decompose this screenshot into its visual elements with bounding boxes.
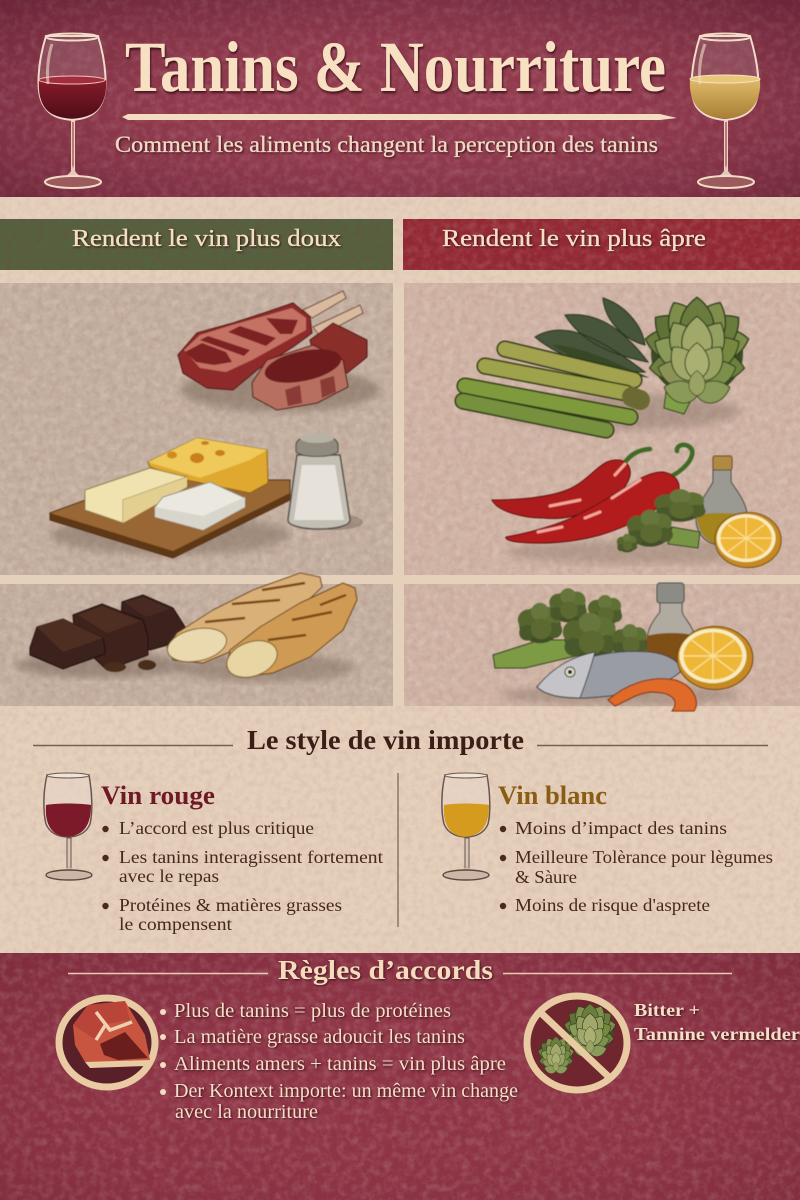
icon: cheese board [50, 433, 363, 558]
heading: vin blanc: Vin blanc [498, 781, 607, 810]
list: white wine bullets: Moins d’impact des tanins [515, 818, 727, 838]
icon: broccoli, fish, lemon and shrimp [493, 583, 753, 711]
panel: red banner [403, 219, 800, 270]
list: white wine bullets [500, 818, 773, 915]
icon: chilies, oil and lemon [492, 445, 781, 568]
icon: dark chocolate [15, 595, 185, 678]
panel: softening foods [0, 283, 393, 706]
callout: bitter tannins [634, 1000, 800, 1044]
heading: wine style: Le style de vin importe [247, 725, 524, 755]
list: white wine bullets: Moins de risque d'asprete [515, 895, 710, 915]
icon: grilled meat [178, 291, 380, 412]
icon: oil bottle [696, 456, 747, 545]
callout: bitter tannins: Bitter + [634, 1000, 700, 1020]
parchment texture [0, 197, 800, 954]
list: red wine bullets: Les tanins interagissent fortement [119, 847, 383, 867]
icon: no bitter artichoke [527, 996, 627, 1090]
icon: meat medallion [59, 998, 155, 1087]
icon: small oil bottle [647, 583, 695, 662]
divider [397, 773, 399, 927]
list: pairing rules [160, 1000, 518, 1123]
list: red wine bullets: L’accord est plus critique [119, 818, 314, 838]
list: white wine bullets: & Sàure [515, 867, 577, 887]
panel: red banner: Rendent le vin plus âpre [442, 226, 706, 252]
list: red wine bullets: le compensent [119, 914, 232, 934]
list: pairing rules: avec la nourriture [175, 1101, 318, 1123]
icon: red wine glass small [44, 773, 92, 880]
list: white wine bullets: Meilleure Tolèrance pour lègumes [515, 847, 773, 867]
subtitle: Comment les aliments changent la perception des tanins [115, 132, 658, 157]
panel: green banner: Rendent le vin plus doux [72, 226, 341, 252]
icon: salt shaker [288, 433, 363, 530]
title: Tanins & Nourriture [125, 27, 666, 107]
list: red wine bullets: Protéines & matières grasses [119, 895, 342, 915]
list: pairing rules: La matière grasse adoucit les tanins [174, 1026, 465, 1048]
list: pairing rules: Aliments amers + tanins = vin plus âpre [174, 1053, 506, 1075]
heading: pairing rules: Règles d’accords [278, 955, 493, 985]
list: pairing rules: Plus de tanins = plus de protéines [174, 1000, 451, 1022]
panel: header [0, 0, 800, 197]
panel: red wine [44, 773, 383, 934]
callout: bitter tannins: Tannine vermelder [634, 1024, 800, 1044]
panel: white wine [442, 773, 773, 915]
panel: pairing rules [0, 953, 800, 1200]
icon: asparagus and artichoke [463, 295, 752, 430]
panel: harshening foods [404, 283, 800, 711]
title rule [122, 114, 677, 120]
icon: baguettes [164, 573, 357, 684]
list: red wine bullets [102, 818, 383, 934]
list: pairing rules: Der Kontext importe: un même vin change [174, 1080, 518, 1102]
heading: vin rouge: Vin rouge [101, 781, 215, 810]
icon: white wine glass [690, 34, 760, 188]
panel: green banner [0, 219, 393, 270]
icon: red wine glass [38, 34, 106, 188]
list: red wine bullets: avec le repas [119, 866, 219, 886]
icon: white wine glass small [442, 773, 490, 880]
